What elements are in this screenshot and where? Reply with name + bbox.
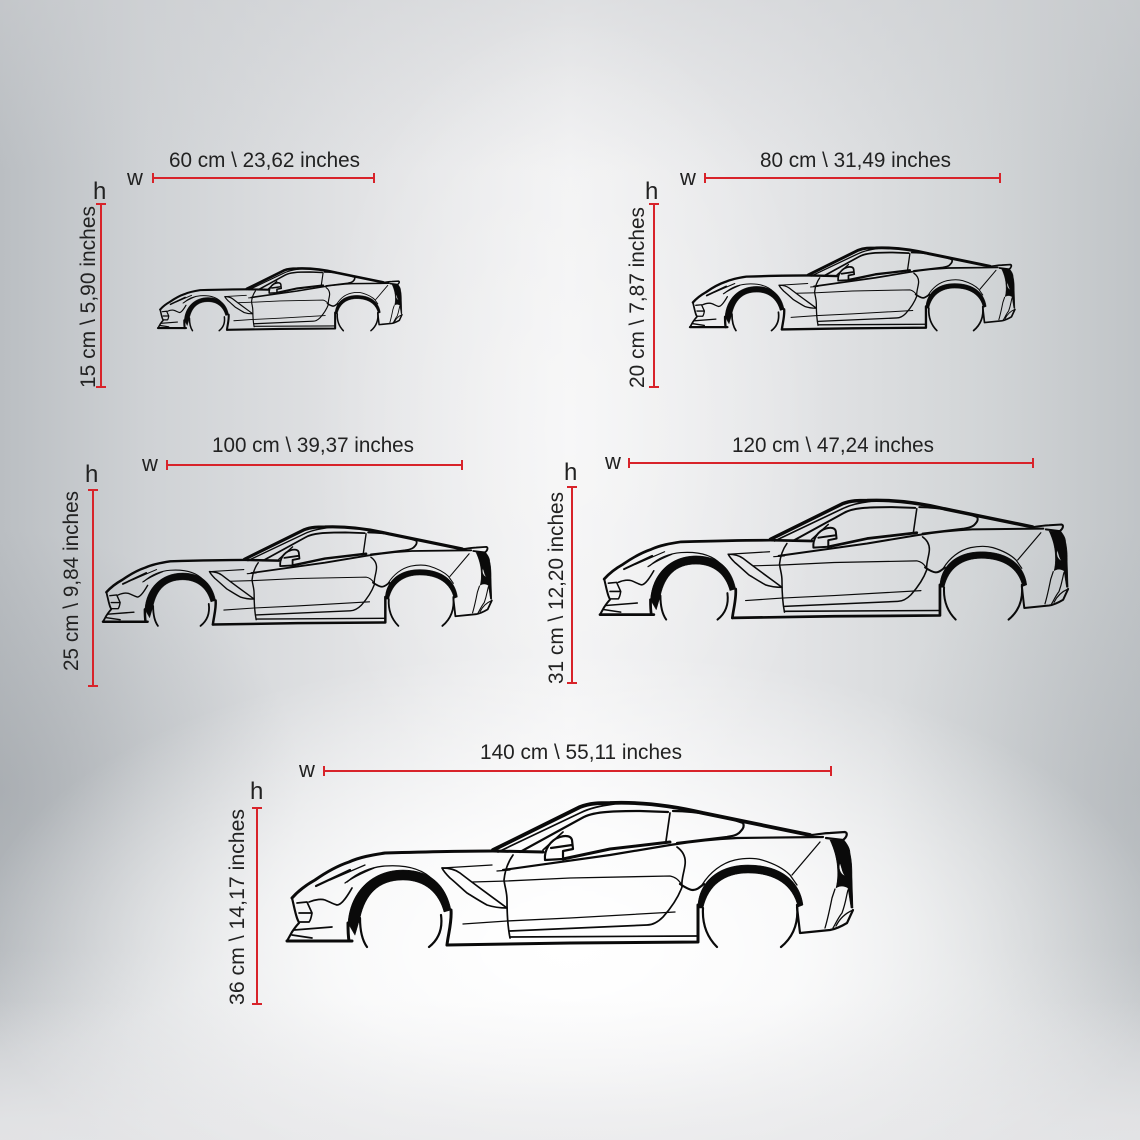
width dimension line bbox=[629, 458, 1033, 468]
height label 31 cm: 31 cm \ 12,20 inches bbox=[545, 492, 568, 684]
width label 100 cm: 100 cm \ 39,37 inches bbox=[212, 434, 414, 457]
height label 20 cm: 20 cm \ 7,87 inches bbox=[626, 207, 649, 388]
width label 80 cm: 80 cm \ 31,49 inches bbox=[760, 149, 951, 172]
width marker w: w bbox=[298, 757, 315, 782]
width label 140 cm: 140 cm \ 55,11 inches bbox=[480, 741, 682, 764]
width dimension line bbox=[153, 173, 374, 183]
width marker w: w bbox=[604, 449, 621, 474]
height label 25 cm: 25 cm \ 9,84 inches bbox=[60, 491, 83, 671]
width dimension line bbox=[324, 766, 831, 776]
width label 120 cm: 120 cm \ 47,24 inches bbox=[732, 434, 934, 457]
height dimension line bbox=[567, 487, 577, 683]
height marker h: h bbox=[93, 178, 106, 205]
car silhouette 60 cm bbox=[158, 268, 402, 331]
car silhouette 80 cm bbox=[690, 248, 1015, 331]
width dimension line bbox=[167, 460, 462, 470]
size 60 cm group bbox=[77, 149, 402, 388]
height dimension line bbox=[96, 204, 106, 387]
size 80 cm group bbox=[626, 149, 1015, 388]
car silhouette 100 cm bbox=[103, 527, 492, 626]
car silhouette 120 cm bbox=[600, 500, 1068, 620]
width dimension line bbox=[705, 173, 1000, 183]
size 100 cm group bbox=[60, 434, 492, 686]
width label 60 cm: 60 cm \ 23,62 inches bbox=[169, 149, 360, 172]
height marker h: h bbox=[645, 178, 658, 205]
height dimension line bbox=[252, 808, 262, 1004]
size 120 cm group bbox=[545, 434, 1068, 684]
width marker w: w bbox=[679, 165, 696, 190]
width marker w: w bbox=[126, 165, 143, 190]
width marker w: w bbox=[141, 451, 158, 476]
car silhouette 140 cm bbox=[287, 803, 853, 947]
height label 15 cm: 15 cm \ 5,90 inches bbox=[77, 206, 100, 388]
height marker h: h bbox=[250, 778, 263, 805]
height marker h: h bbox=[85, 461, 98, 488]
size 140 cm group bbox=[226, 741, 853, 1005]
height dimension line bbox=[88, 490, 98, 686]
height marker h: h bbox=[564, 459, 577, 486]
height label 36 cm: 36 cm \ 14,17 inches bbox=[226, 809, 249, 1005]
height dimension line bbox=[649, 204, 659, 387]
